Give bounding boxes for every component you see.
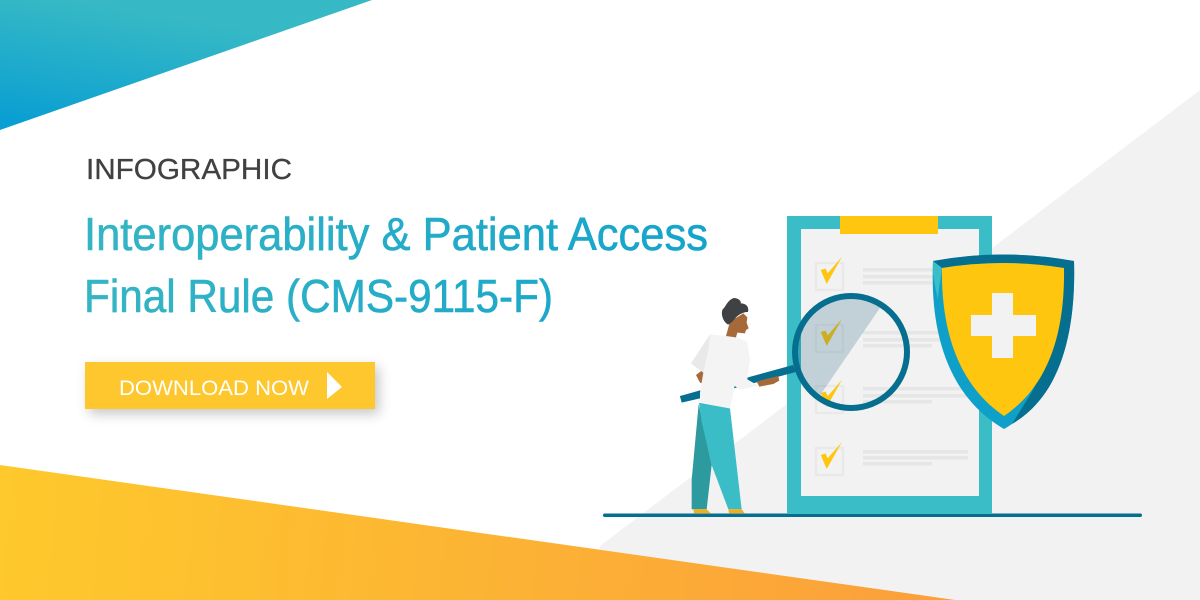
magnifier handle bbox=[680, 365, 796, 402]
holding hand bbox=[757, 376, 779, 387]
hip hand bbox=[696, 369, 705, 384]
clipboard bbox=[787, 216, 992, 514]
checklist row 2 bbox=[816, 319, 968, 352]
title: Final Rule (CMS-9115-F) bbox=[84, 270, 553, 322]
shield bbox=[933, 254, 1074, 429]
icon: play arrow bbox=[327, 372, 342, 399]
eyebrow label: INFOGRAPHIC bbox=[86, 154, 292, 186]
background: teal corner triangle bbox=[0, 0, 372, 130]
checklist row 1 bbox=[816, 257, 968, 290]
shirt bbox=[691, 334, 759, 408]
person bbox=[680, 298, 779, 513]
clipboard clip bbox=[840, 216, 938, 234]
hair bbox=[722, 298, 748, 325]
title bbox=[84, 208, 708, 322]
checklist row 3 bbox=[816, 380, 968, 413]
download button: DOWNLOAD NOW bbox=[119, 377, 309, 400]
magnifying glass bbox=[680, 285, 907, 410]
handle over shirt edge bbox=[680, 390, 700, 403]
rear leg bbox=[692, 404, 712, 509]
front leg bbox=[699, 403, 742, 509]
background: yellow-orange triangle bbox=[0, 465, 955, 600]
title: Interoperability & Patient Access bbox=[84, 208, 708, 260]
download button bbox=[85, 362, 375, 409]
icon: medical cross bbox=[971, 293, 1036, 358]
neck and face bbox=[726, 313, 749, 337]
checklist row 4 bbox=[816, 442, 968, 475]
ground line bbox=[603, 514, 1142, 517]
background: grey triangle bbox=[600, 90, 1200, 600]
shoes bbox=[693, 509, 745, 513]
shirt shaded arm bbox=[691, 334, 710, 373]
